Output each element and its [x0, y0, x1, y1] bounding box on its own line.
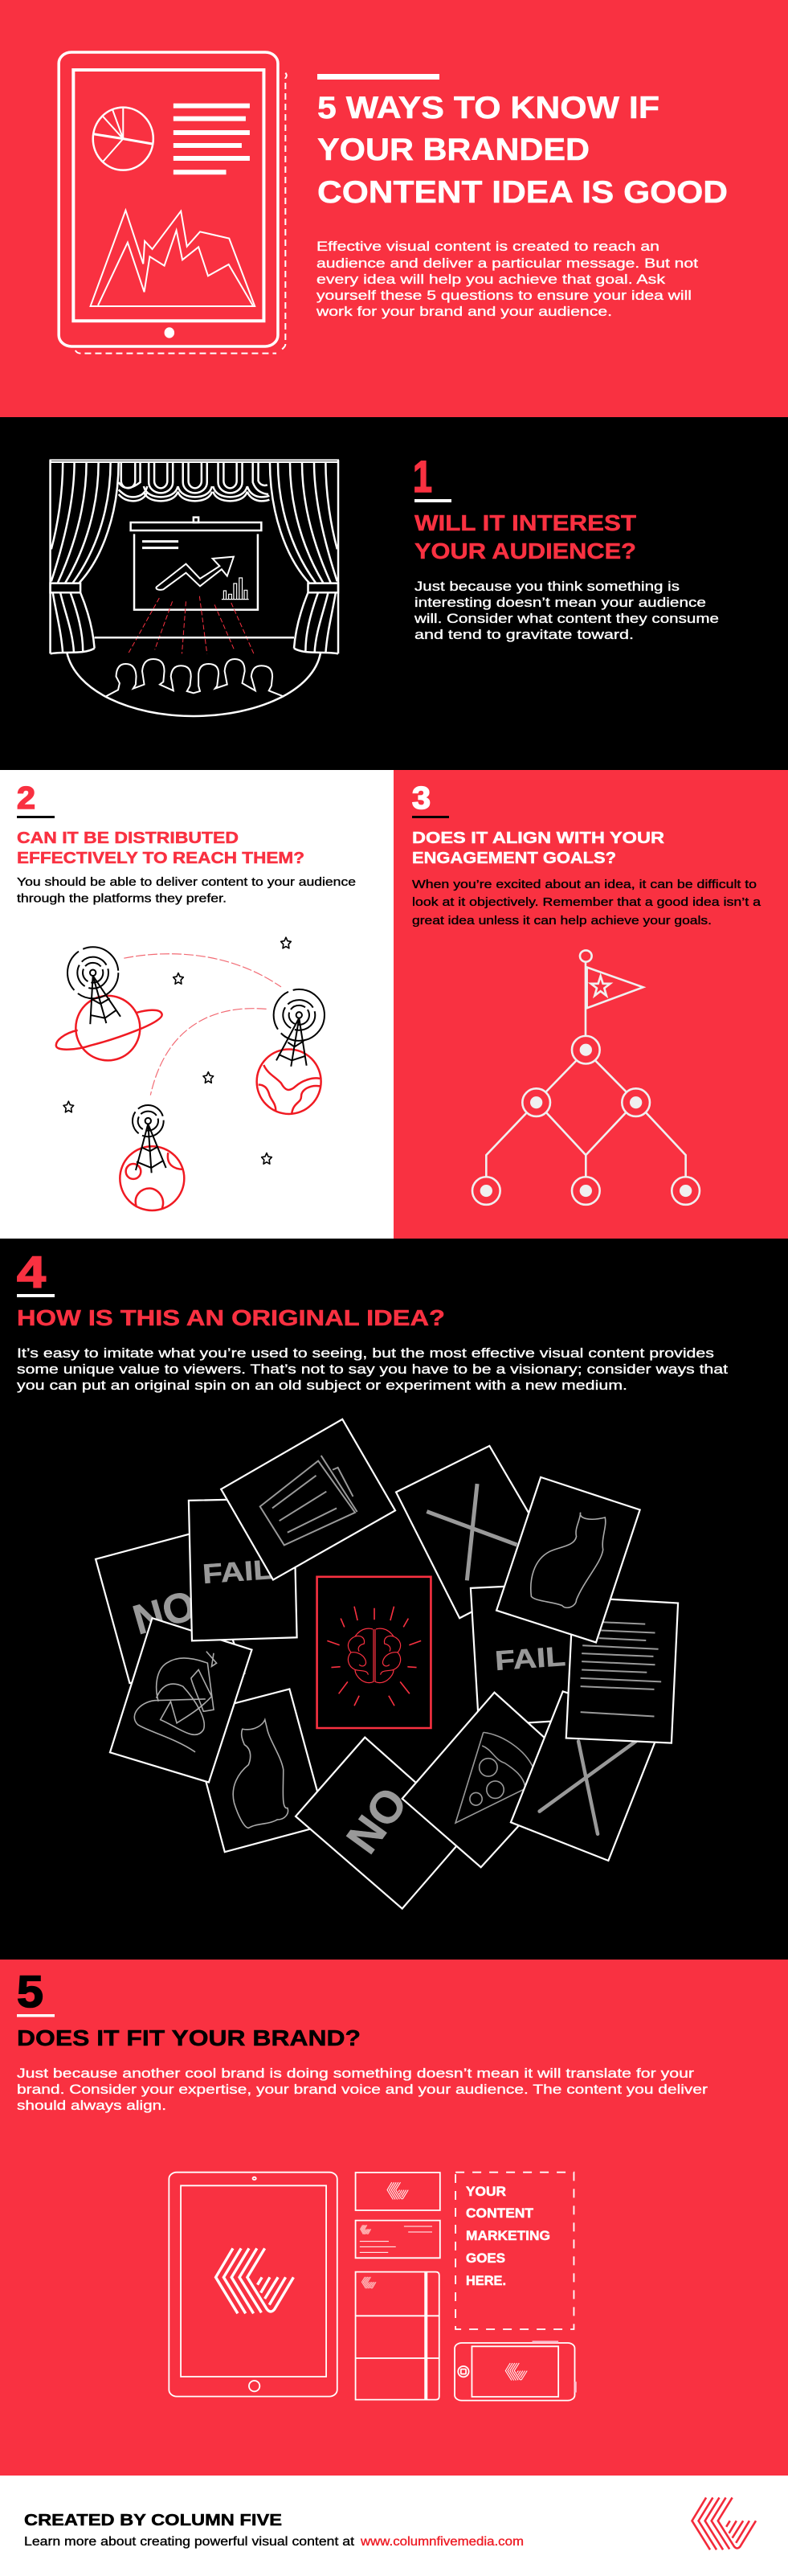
text block: you can put an original spin on an old subject or experiment with a new medium.: [17, 1378, 627, 1393]
text block: intro: [316, 239, 698, 319]
title: YOUR BRANDED: [317, 133, 590, 167]
planet 2 with continents: [257, 1049, 321, 1114]
paper: cat: [188, 1689, 326, 1852]
text block: [17, 1345, 728, 1393]
tree connectors: [486, 1060, 686, 1177]
flag: [580, 950, 643, 1036]
heading: [17, 829, 304, 867]
curtain rail: [51, 460, 338, 462]
text block: and tend to gravitate toward.: [414, 627, 634, 642]
section number 2: 2: [17, 781, 35, 816]
decorative rule: [412, 816, 449, 818]
letterhead card: [356, 2221, 440, 2258]
section number 4: 4: [17, 1247, 46, 1297]
icon: flag on goal tree: [472, 950, 700, 1205]
callout text: HERE.: [466, 2273, 506, 2288]
text block: [414, 579, 719, 642]
callout text: [466, 2184, 550, 2288]
heading: DOES IT FIT YOUR BRAND?: [17, 2025, 361, 2050]
tree nodes: [472, 1036, 700, 1205]
panel: section 4: [0, 1239, 788, 1960]
stars: [63, 937, 291, 1164]
icon: tablet with charts: [59, 52, 287, 354]
dashed placeholder: [455, 2173, 574, 2329]
text block: some unique value to viewers. That’s not to say you have to be a visionary; consider ways that: [17, 1362, 728, 1377]
tower 2: [274, 989, 325, 1067]
tablet with logo: [169, 2173, 337, 2397]
text block: brand. Consider your expertise, your brand voice and your audience. The content you deliver: [17, 2082, 708, 2097]
heading: [414, 510, 636, 563]
text block: intro: yourself these 5 questions to ensure your idea will: [316, 288, 692, 303]
callout text: YOUR: [466, 2184, 506, 2199]
stage edge: [67, 637, 321, 716]
text block: Just because another cool brand is doing something doesn’t mean it will translate for your: [17, 2066, 694, 2081]
decorative rule: [414, 499, 451, 502]
paper: FAIL: FAIL: [202, 1554, 274, 1590]
business card: [356, 2173, 440, 2210]
paper: document: [221, 1419, 395, 1580]
paper: X: [396, 1446, 560, 1618]
decorative rule: [17, 816, 55, 818]
panel: section 3: [394, 770, 788, 1239]
credit text: Learn more about creating powerful visual content at: [24, 2535, 355, 2549]
heading: DOES IT ALIGN WITH YOUR: [412, 829, 664, 847]
panel: section 1: [0, 417, 788, 770]
audience silhouettes: [105, 659, 284, 697]
title: CONTENT IDEA IS GOOD: [317, 175, 728, 210]
text block: You should be able to deliver content to your audience: [17, 876, 356, 889]
title: [317, 91, 728, 210]
text block: should always align.: [17, 2098, 166, 2113]
callout text: MARKETING: [466, 2228, 550, 2243]
text block: When you’re excited about an idea, it can be difficult to: [412, 878, 757, 891]
paper: NO: [96, 1533, 244, 1683]
title: 5 WAYS TO KNOW IF: [317, 91, 659, 125]
text block: [17, 876, 356, 905]
icon: Column Five logo: [692, 2497, 756, 2549]
decorative rule: [17, 2014, 55, 2017]
heading: [412, 829, 664, 867]
projector beams: [129, 596, 254, 653]
text block: [412, 878, 761, 928]
text block: intro: work for your brand and your audience.: [316, 304, 612, 319]
valance: [119, 462, 269, 501]
illustration: branded media: [169, 2173, 576, 2401]
decorative rule: [17, 1294, 55, 1297]
notebook: [356, 2272, 439, 2400]
text block: [17, 2066, 708, 2113]
decorative title rule: [317, 74, 439, 80]
credit heading: CREATED BY COLUMN FIVE: [24, 2512, 282, 2529]
text block: great idea unless it can help achieve your goals.: [412, 915, 712, 928]
credit text: [24, 2535, 524, 2549]
icon: theater stage with presentation: [51, 460, 338, 716]
paper: X: [511, 1691, 663, 1861]
callout text: GOES: [466, 2250, 505, 2266]
credit text: www.columnfivemedia.com: [360, 2535, 524, 2549]
phone: [455, 2342, 576, 2401]
text block: intro: audience and deliver a particular message. But not: [316, 256, 698, 271]
heading: CAN IT BE DISTRIBUTED: [17, 829, 239, 847]
illustration: pile of rejected idea papers around a brain: [96, 1419, 678, 1909]
section number 3: 3: [412, 781, 431, 816]
section number 5: 5: [17, 1966, 43, 2017]
text block: interesting doesn’t mean your audience: [414, 595, 706, 610]
text block: intro: every idea will help you achieve that goal. Ask: [316, 272, 666, 287]
paper: FAIL: FAIL: [494, 1641, 566, 1677]
paper: lined text: [566, 1597, 678, 1743]
heading: WILL IT INTEREST: [414, 510, 636, 535]
text block: through the platforms they prefer.: [17, 892, 227, 905]
right curtain: [270, 460, 338, 653]
card: brain idea: [317, 1577, 431, 1728]
panel: hero: [0, 0, 788, 417]
heading: HOW IS THIS AN ORIGINAL IDEA?: [17, 1305, 445, 1330]
text block: It’s easy to imitate what you’re used to seeing, but the most effective visual content provides: [17, 1345, 714, 1361]
panel: section 5: [0, 1960, 788, 2476]
text block: look at it objectively. Remember that a good idea isn’t a: [412, 896, 761, 909]
paper: FAIL: [189, 1498, 297, 1640]
callout text: CONTENT: [466, 2205, 534, 2221]
heading: YOUR AUDIENCE?: [414, 539, 636, 563]
paper: scribble: [110, 1618, 251, 1783]
projection screen: [131, 518, 261, 610]
tower 3: [133, 1105, 166, 1173]
paper: cat: [496, 1477, 640, 1642]
section number 1: 1: [413, 451, 432, 502]
paper: pizza: [402, 1693, 574, 1867]
planet 3 with craters: [120, 1146, 184, 1210]
signal arcs between towers: [124, 954, 281, 1096]
text block: intro: Effective visual content is created to reach an: [316, 239, 659, 254]
heading: EFFECTIVELY TO REACH THEM?: [17, 849, 304, 867]
tower 1: [67, 947, 120, 1024]
paper: NO: [296, 1738, 470, 1909]
panel: footer: [0, 2476, 788, 2576]
panel: section 2: [0, 770, 394, 1239]
heading: ENGAGEMENT GOALS?: [412, 849, 616, 867]
text block: Just because you think something is: [414, 579, 680, 594]
ringed planet: [56, 996, 162, 1060]
paper: NO: NO: [337, 1778, 417, 1862]
icon: planets and broadcast towers: [56, 937, 325, 1210]
paper: NO: NO: [128, 1582, 201, 1644]
text block: will. Consider what content they consume: [414, 611, 719, 626]
paper: FAIL: [471, 1583, 578, 1726]
left curtain: [51, 460, 119, 653]
